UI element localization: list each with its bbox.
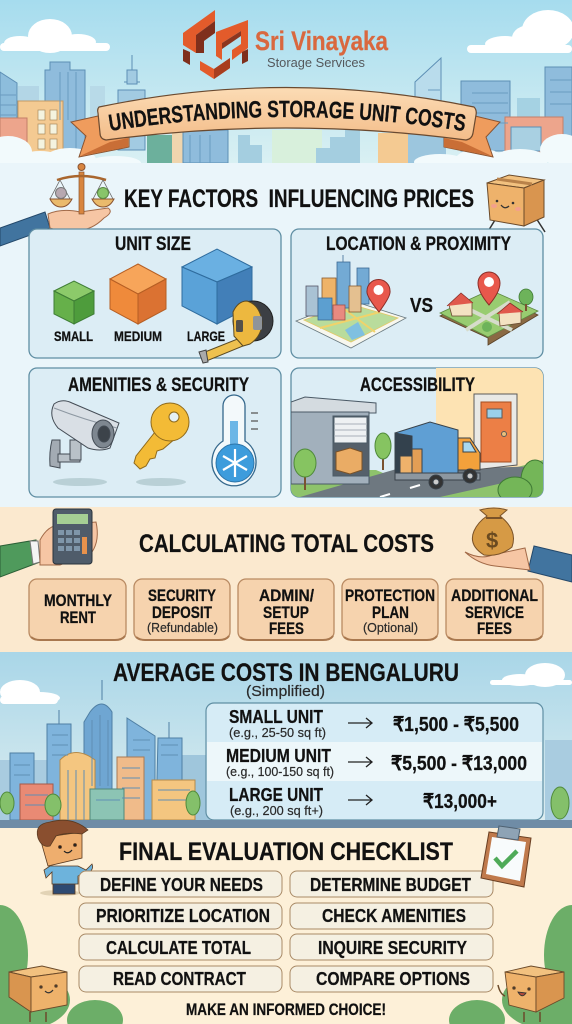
cost card: security deposit: [134, 579, 230, 640]
label: versus: VS: [410, 295, 433, 317]
icon: company logo: [183, 10, 248, 79]
panel: accessibility: [291, 368, 549, 503]
table: costs by unit size: [206, 703, 543, 820]
panel: location and proximity: [291, 229, 543, 358]
row: large unit: LARGE UNIT: [229, 785, 323, 805]
icon: right box mascot: [498, 966, 564, 1022]
heading: key factors: KEY FACTORS INFLUENCING PRICES: [124, 185, 474, 213]
ribbon tails: [71, 116, 129, 157]
icon: tree center: [375, 433, 391, 470]
panel: key factors background: [0, 163, 572, 507]
checklist item: COMPARE OPTIONS: [316, 969, 470, 989]
cost card: security deposit: SECURITY: [148, 586, 217, 605]
cost card: protection plan: PLAN: [372, 603, 409, 622]
panel: final evaluation checklist: [0, 820, 572, 1024]
label: large: LARGE: [187, 328, 225, 344]
cost card: admin setup fees: [238, 579, 334, 640]
icon: hand with money bag: $: [486, 528, 498, 553]
panel: unit size: [29, 229, 281, 363]
heading: checklist: FINAL EVALUATION CHECKLIST: [119, 838, 453, 866]
title text: UNDERSTANDING STORAGE UNIT COSTS: [108, 100, 466, 131]
row: medium unit: [226, 746, 527, 779]
cost card: protection plan: (Optional): [363, 620, 418, 635]
logo text: Storage Services: Storage Services: [267, 55, 365, 70]
label: medium: MEDIUM: [114, 328, 162, 344]
checklist item: [290, 966, 493, 992]
checklist item: DETERMINE BUDGET: [310, 875, 471, 895]
row: large unit: ₹13,000+: [423, 791, 497, 813]
cost card: security deposit: DEPOSIT: [152, 603, 212, 622]
panel: amenities and security: [29, 368, 281, 497]
logo text: Sri Vinayaka: Sri Vinayaka: [255, 26, 389, 56]
cost card: admin setup fees: FEES: [269, 619, 304, 638]
checklist item: DEFINE YOUR NEEDS: [100, 875, 263, 895]
icon: cardboard box mascot: [487, 175, 545, 233]
panel: average costs in bengaluru: [0, 652, 572, 820]
heading: unit size: UNIT SIZE: [115, 234, 191, 255]
icon: right bushes: [449, 905, 572, 1024]
city skyline: [0, 55, 572, 163]
shadows: [53, 478, 186, 486]
icon: bush: [498, 460, 543, 497]
icon: delivery truck: [395, 422, 480, 489]
row: medium unit: (e.g., 100-150 sq ft): [226, 764, 334, 779]
building stripes: [0, 72, 572, 163]
cost card: additional service fees: ADDITIONAL: [451, 586, 538, 605]
building windows: [38, 110, 57, 149]
row: small unit: SMALL UNIT: [229, 707, 323, 727]
checklist item: [290, 934, 493, 960]
icon: snow thermometer: [212, 395, 258, 486]
icon: hand with calculator: [0, 509, 97, 577]
cost card: additional service fees: [446, 579, 543, 640]
subheading: simplified: (Simplified): [246, 683, 325, 700]
icon: door: [474, 394, 517, 470]
city skyline: [0, 680, 572, 820]
icon: storage garage: [291, 397, 376, 484]
cost card: monthly rent: [29, 579, 126, 640]
icon: red map pin village: [478, 272, 500, 305]
row: medium unit: ₹5,500 - ₹13,000: [391, 753, 527, 775]
icon: security camera: [50, 401, 119, 468]
heading: amenities: AMENITIES & SECURITY: [68, 375, 249, 396]
checklist item: [79, 966, 282, 992]
heading: calculating: CALCULATING TOTAL COSTS: [139, 530, 434, 558]
checklist item: CALCULATE TOTAL: [106, 938, 251, 958]
icon: small trees: [0, 787, 569, 819]
cost card: admin setup fees: ADMIN/: [259, 586, 314, 605]
ground: [291, 460, 543, 497]
lower clouds: [0, 134, 572, 163]
cost card: monthly rent: RENT: [60, 608, 96, 627]
closing message: MAKE AN INFORMED CHOICE!: [186, 1000, 386, 1019]
building stripes: [14, 715, 190, 820]
cost card: protection plan: PROTECTION: [345, 586, 435, 605]
cost card: additional service fees: FEES: [477, 619, 512, 638]
checklist item: INQUIRE SECURITY: [318, 938, 467, 958]
icon: tree left: [294, 449, 316, 490]
icon: hand with money bag: [465, 508, 572, 582]
icon: left box mascot: [9, 966, 67, 1022]
icon: right cloud: [467, 10, 572, 53]
cost card: monthly rent: MONTHLY: [44, 591, 113, 610]
checklist item: READ CONTRACT: [113, 969, 246, 989]
icon: village with pin: [440, 289, 538, 345]
heading: accessibility: ACCESSIBILITY: [360, 375, 475, 396]
checklist item: [290, 871, 493, 897]
ribbon body: [98, 88, 476, 140]
cost card: additional service fees: SERVICE: [465, 603, 524, 622]
icon: red map pin city: [367, 280, 390, 312]
checklist item: [79, 934, 282, 960]
row: medium unit: MEDIUM UNIT: [226, 746, 331, 766]
cost card: security deposit: (Refundable): [147, 620, 218, 635]
panel: calculating total costs: [0, 507, 572, 652]
row: small unit: ₹1,500 - ₹5,500: [393, 714, 519, 736]
row: large unit: (e.g., 200 sq ft+): [230, 803, 323, 818]
icon: tape measure: [199, 301, 273, 363]
row: small unit: [229, 707, 519, 740]
icon: medium cube: [110, 264, 166, 324]
checklist item: [290, 903, 493, 929]
row: large unit: [229, 785, 497, 818]
icon: golden key: [134, 403, 189, 469]
icon: hand holding scales: [0, 164, 114, 246]
checklist item: CHECK AMENITIES: [322, 906, 466, 926]
heading: average costs: AVERAGE COSTS IN BENGALURU: [113, 659, 459, 687]
icon: small cube: [54, 281, 94, 324]
heading: location: LOCATION & PROXIMITY: [326, 234, 511, 255]
clouds: [0, 663, 572, 704]
label: small: SMALL: [54, 328, 93, 344]
icon: city map with pin: [296, 255, 406, 348]
icon: boxhead character: [37, 820, 93, 896]
icon: clipboard with check: [481, 826, 531, 887]
panel: header sky: [0, 0, 572, 172]
row: small unit: (e.g., 25-50 sq ft): [229, 725, 326, 740]
cost card: admin setup fees: SETUP: [263, 603, 309, 622]
cost card: protection plan: [342, 579, 438, 640]
checklist item: [79, 871, 282, 897]
checklist item: [79, 903, 282, 929]
icon: left cloud: [0, 19, 110, 53]
checklist item: PRIORITIZE LOCATION: [96, 906, 270, 926]
icon: large cube: [182, 249, 252, 324]
title banner: [70, 86, 501, 158]
icon: left bushes: [0, 905, 123, 1024]
